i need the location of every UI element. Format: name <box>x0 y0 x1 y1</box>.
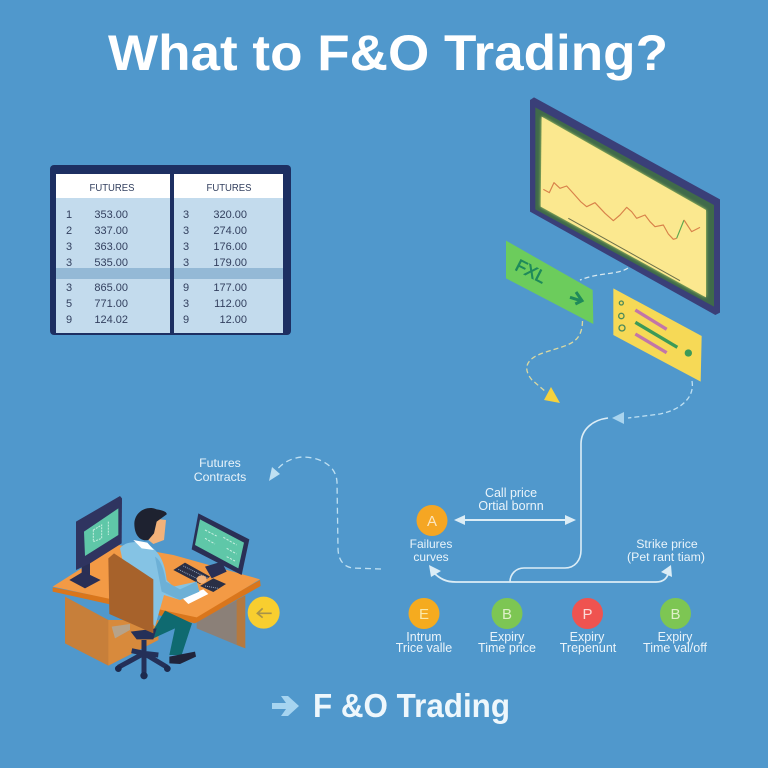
desk pedestal <box>65 597 158 666</box>
table right column: 112.00 <box>214 298 247 310</box>
item: expiry time value <box>643 598 707 655</box>
legs <box>153 611 196 664</box>
table right column: 177.00 <box>213 282 247 294</box>
table left column: 3 <box>66 257 72 269</box>
marker: A: A <box>427 513 437 530</box>
label: futures contracts: Futures <box>199 456 241 470</box>
table left column: 2 <box>66 225 72 237</box>
table left column: 3 <box>66 241 72 253</box>
arrow: dashed list to connector <box>612 381 692 424</box>
table left column: 771.00 <box>94 298 128 310</box>
item: expiry time price <box>478 598 536 655</box>
label: call price: Ortial bornn <box>478 499 544 513</box>
table right column: 3 <box>183 225 189 237</box>
label: failures curves: curves <box>413 550 449 564</box>
table right column: 3 <box>183 209 189 221</box>
office chair <box>108 553 171 679</box>
table right column: 9 <box>183 282 189 294</box>
label: strike price: Strike price <box>636 537 698 551</box>
label: call price: Call price <box>485 486 537 500</box>
torso and arm <box>120 540 207 627</box>
illustration: person at desk <box>53 496 280 679</box>
table left column: 337.00 <box>94 225 128 237</box>
label: call price <box>478 486 544 513</box>
item: expiry treatment <box>560 598 617 655</box>
table right column: 179.00 <box>213 257 247 269</box>
label: strike price <box>627 537 705 564</box>
item: intrum trice value: Trice valle <box>396 641 452 655</box>
table right column: 3 <box>183 257 189 269</box>
item: expiry time price: Expiry <box>490 630 525 644</box>
table left column: 124.02 <box>94 314 128 326</box>
marker: A <box>416 505 448 536</box>
item: expiry time value: Expiry <box>658 630 693 644</box>
table left column: 1 <box>66 209 72 221</box>
table left column: 353.00 <box>94 209 128 221</box>
card: yellow list <box>613 288 702 382</box>
chart line <box>543 183 700 281</box>
label: failures curves <box>410 537 452 564</box>
panel: isometric chart monitor <box>530 97 720 315</box>
table right column: 3 <box>183 241 189 253</box>
table left column <box>66 183 135 326</box>
arrow: dashed tag to yellow pointer <box>527 321 582 403</box>
icon: tag arrow <box>570 292 582 304</box>
card: FXL green tag <box>506 241 593 324</box>
item: expiry treatment: P <box>582 606 593 623</box>
item: expiry time price: Time price <box>478 641 536 655</box>
item: intrum trice value <box>396 598 452 655</box>
table left column: 3 <box>66 282 72 294</box>
item: expiry treatment: Trepenunt <box>560 641 617 655</box>
arrow: dashed curve to futures contracts <box>269 457 381 569</box>
table left column: 865.00 <box>94 282 128 294</box>
table left column: 9 <box>66 314 72 326</box>
table left column: 5 <box>66 298 72 310</box>
desk top <box>53 545 261 623</box>
item: expiry treatment: Expiry <box>570 630 605 644</box>
table left column: FUTURES <box>90 183 135 194</box>
label: failures curves: Failures <box>410 537 452 551</box>
table right column: 274.00 <box>213 225 247 237</box>
label: strike price: (Pet rant tiam) <box>627 550 705 564</box>
arrow: call price double arrow <box>454 515 576 525</box>
item: expiry time value: B <box>670 606 681 623</box>
item: expiry time price: B <box>502 606 512 623</box>
footer heading: F &O Trading <box>313 687 510 724</box>
table right column <box>183 183 252 326</box>
item: intrum trice value: Intrum <box>406 630 442 644</box>
panel: futures table <box>50 165 291 335</box>
head <box>134 508 167 544</box>
table left column: 535.00 <box>94 257 128 269</box>
label: futures contracts <box>194 456 246 484</box>
label: futures contracts: Contracts <box>194 470 246 484</box>
arrow: main connector line <box>510 418 608 582</box>
right monitor <box>192 513 249 578</box>
table right column: 320.00 <box>213 209 247 221</box>
table right column: 12.00 <box>219 314 247 326</box>
card: FXL green tag: FXL <box>512 255 550 287</box>
title: What to F&O Trading? <box>108 25 668 81</box>
arrow: footer pointer <box>272 696 299 716</box>
item: expiry time value: Time val/off <box>643 641 707 655</box>
keyboard and mouse pad <box>173 563 226 604</box>
item: intrum trice value: E <box>419 606 429 623</box>
arrow: dashed monitor to tag <box>580 268 628 280</box>
table left column: 363.00 <box>94 241 128 253</box>
table right column: 176.00 <box>213 241 247 253</box>
table right column: 9 <box>183 314 189 326</box>
arrow: branch line to both labels <box>429 565 672 582</box>
table right column: 3 <box>183 298 189 310</box>
left monitor <box>69 496 122 588</box>
table right column: FUTURES <box>206 183 252 194</box>
icon: yellow back arrow <box>248 597 280 629</box>
desk right panel <box>197 595 245 648</box>
